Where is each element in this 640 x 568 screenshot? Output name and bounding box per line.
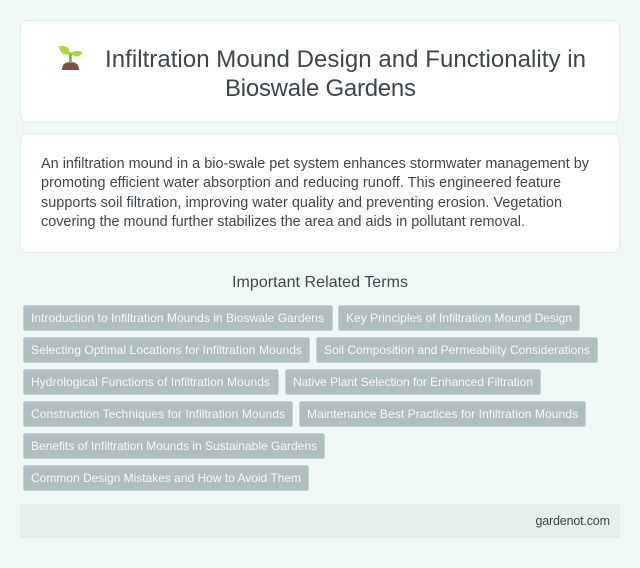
icon: sprout (58, 46, 82, 70)
title: Infiltration Mound Design and Functionality in (105, 46, 586, 73)
description text: covering the mound further stabilizes the area and aids in pollutant removal. (41, 214, 525, 230)
title card (20, 20, 620, 122)
description text (41, 156, 590, 230)
related term tags: Construction Techniques for Infiltration Mounds (31, 407, 285, 421)
title: Bioswale Gardens (225, 75, 416, 102)
related term tags: Benefits of Infiltration Mounds in Sustainable Gardens (31, 439, 317, 453)
description text: promoting efficient water absorption and reducing runoff. This engineered feature (41, 175, 561, 191)
related term tags: Introduction to Infiltration Mounds in Bioswale Gardens (31, 311, 324, 325)
related term tags: Common Design Mistakes and How to Avoid Them (31, 471, 301, 485)
related term tags: Selecting Optimal Locations for Infiltration Mounds (31, 343, 302, 357)
related term tags: Key Principles of Infiltration Mound Design (346, 311, 572, 325)
description text: supports soil filtration, improving water quality and preventing erosion. Vegetation (41, 195, 562, 211)
related term tags (24, 306, 598, 490)
related term tags: Maintenance Best Practices for Infiltration Mounds (307, 407, 578, 421)
heading: related terms: Important Related Terms (232, 274, 408, 291)
description text: An infiltration mound in a bio-swale pet system enhances stormwater management by (41, 156, 590, 172)
title (105, 46, 586, 102)
related term tags: Soil Composition and Permeability Considerations (324, 343, 590, 357)
footer: gardenot.com (536, 514, 610, 528)
related term tags: Hydrological Functions of Infiltration Mounds (31, 375, 270, 389)
panel: description (20, 134, 620, 252)
related term tags: Native Plant Selection for Enhanced Filtration (293, 375, 533, 389)
footer (20, 504, 620, 538)
